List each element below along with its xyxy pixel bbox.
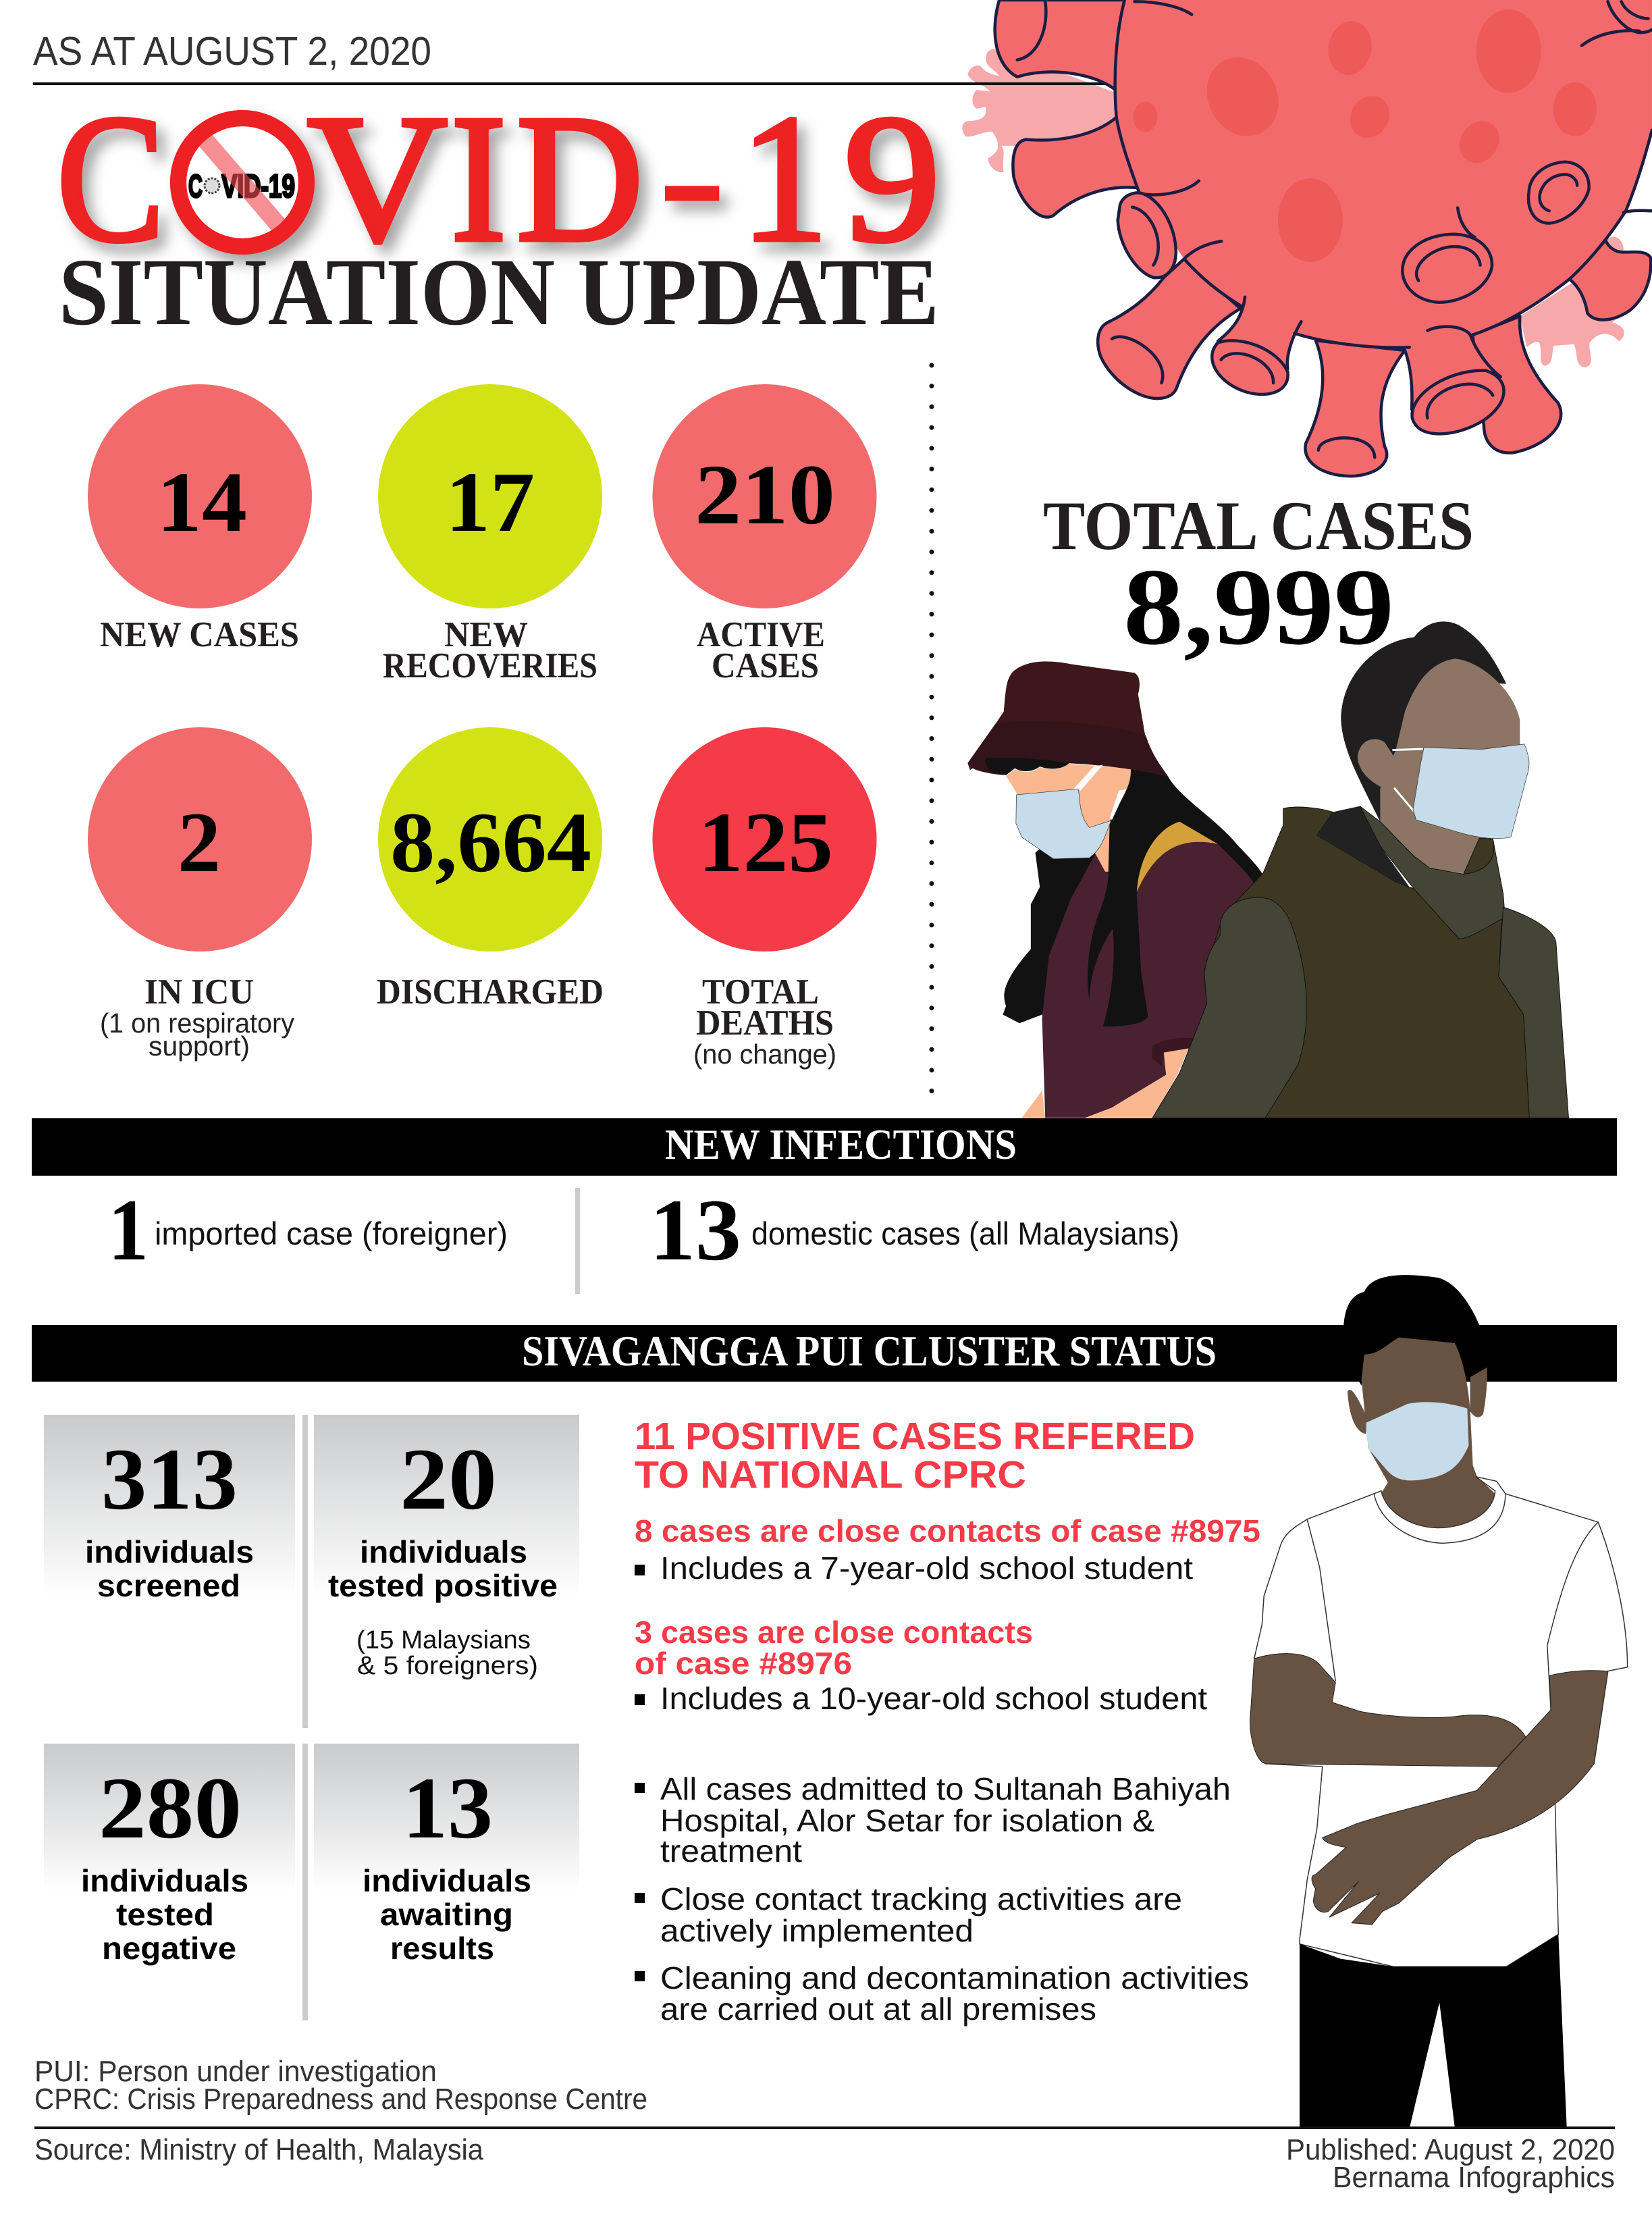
title: COVID-19: C [57,78,165,280]
panel: tested positive: tested positive [328,1568,558,1603]
publication credit: Published: August 2, 2020 [1286,2133,1615,2166]
bullet: hospital admission: treatment [660,1833,802,1869]
text block: case 8975 contacts: Includes a 7-year-old school student [660,1550,1193,1586]
panel: awaiting results: 13 [402,1760,493,1857]
icon: prohibition sign with COVID-19: C [188,169,203,205]
glossary notes: CPRC: Crisis Preparedness and Response Centre [34,2083,647,2116]
panel: new cases: NEW CASES [100,615,299,654]
panel: tested positive: & 5 foreigners) [357,1652,538,1680]
text block: case 8975 contacts [635,1513,1260,1586]
icon: prohibition sign with COVID-19: VID-19 [221,169,295,205]
heading bar: new infections [32,1118,1617,1176]
panel: new recoveries [378,384,602,685]
panel: tested negative: individuals [81,1863,248,1898]
panel: discharged [377,727,604,1012]
icon: prohibition sign with COVID-19 [178,118,307,246]
heading bar: new infections: NEW INFECTIONS [665,1120,1017,1168]
title: COVID-19: D [516,78,643,280]
illustration: two masked pedestrians [967,621,1568,1118]
total cases number: 8,999 [1123,547,1394,668]
icon: pale background viruses [962,49,1630,367]
stat: imported case [108,1182,508,1279]
panel: tested negative: tested [116,1897,214,1932]
vertical divider [575,1188,580,1294]
panel: awaiting results: results [390,1931,494,1966]
dotted divider [929,365,934,1094]
header rule [33,82,1112,85]
text block: case 8975 contacts: 8 cases are close contacts of case #8975 [635,1513,1260,1548]
title: COVID-19: V [307,78,448,280]
panel: in ICU [88,727,312,1062]
panel: new cases [88,384,312,654]
stat: domestic cases [649,1182,1179,1279]
stat: imported case: imported case (foreigner) [155,1216,508,1251]
panel: in ICU: IN ICU [144,972,254,1012]
bullet: contact tracking: actively implemented [660,1913,974,1948]
text block: case 8976 contacts [635,1615,1207,1716]
bullet: decontamination [635,1960,1249,2027]
heading: positive cases referred: TO NATIONAL CPRC [635,1453,1026,1496]
stat: imported case: 1 [108,1182,149,1279]
source: Source: Ministry of Health, Malaysia [34,2133,483,2166]
text block: case 8976 contacts: Includes a 10-year-old school student [660,1681,1207,1716]
panel: in ICU: 2 [178,795,221,890]
glossary notes [34,2055,647,2116]
publication credit [1286,2133,1615,2194]
panel: tested positive: 20 [400,1431,497,1528]
panel: active cases: CASES [712,646,819,685]
bullet: hospital admission: All cases admitted to Sultanah Bahiyah [660,1771,1231,1806]
panel: total deaths: DEATHS [696,1003,834,1043]
panel: tested negative [44,1744,295,1966]
heading bar: Sivagangga cluster [32,1325,1617,1382]
title: COVID-19: 9 [844,78,940,280]
panel: new cases: 14 [157,455,247,550]
panel: discharged: 8,664 [390,795,591,890]
panel: new recoveries: 17 [446,455,535,550]
panel: screened: 313 [101,1431,238,1528]
bullet: hospital admission: Hospital, Alor Setar for isolation & [660,1803,1154,1838]
total cases heading: TOTAL CASES [1043,488,1474,565]
panel: screened: individuals [85,1534,254,1569]
footer rule [34,2126,1615,2129]
bullet: contact tracking [635,1881,1182,1948]
panel: awaiting results: individuals [363,1863,531,1898]
stat: domestic cases: 13 [649,1182,741,1279]
text block: case 8976 contacts: of case #8976 [635,1646,852,1681]
text block: case 8976 contacts: 3 cases are close contacts [635,1615,1033,1650]
divider: stats upper [302,1415,308,1728]
panel: new recoveries: NEW [444,615,528,654]
panel: active cases [652,384,876,685]
panel: total deaths: TOTAL [702,972,819,1012]
heading bar: Sivagangga cluster: SIVAGANGGA PUI CLUSTER STATUS [522,1327,1217,1375]
panel: total deaths: 125 [698,795,833,890]
bullet: hospital admission [635,1771,1231,1869]
publication credit: Bernama Infographics [1333,2161,1615,2194]
panel: screened [44,1415,295,1603]
title: COVID-19: I [451,78,506,280]
glossary notes: PUI: Person under investigation [34,2055,437,2088]
panel: new recoveries: RECOVERIES [383,646,597,685]
title: COVID-19 [57,74,940,280]
title: COVID-19: - [658,74,726,276]
panel: screened: screened [97,1568,240,1603]
title: COVID-19: 1 [741,78,828,280]
bullet: decontamination: Cleaning and decontamination activities [660,1960,1249,1995]
panel: tested negative: negative [102,1931,236,1966]
illustration: standing man in mask [1250,1275,1628,2128]
panel: active cases: 210 [695,448,835,542]
panel: tested negative: 280 [99,1760,242,1857]
panel: total deaths [652,727,876,1070]
panel: active cases: ACTIVE [697,615,825,654]
heading: positive cases referred: 11 POSITIVE CASES REFERED [635,1415,1195,1458]
bullet: decontamination: are carried out at all premises [660,1991,1096,2027]
bullet: contact tracking: Close contact tracking activities are [660,1881,1182,1916]
panel: in ICU: support) [149,1030,250,1062]
heading: positive cases referred [635,1415,1195,1496]
panel: discharged: DISCHARGED [377,972,604,1012]
panel: total deaths: (no change) [693,1039,836,1070]
panel: in ICU: (1 on respiratory [100,1008,294,1039]
panel: tested positive: (15 Malaysians [356,1626,531,1654]
panel: tested positive: individuals [360,1534,527,1569]
stat: domestic cases: domestic cases (all Malaysians) [751,1216,1179,1251]
date heading: AS AT AUGUST 2, 2020 [33,29,431,74]
panel: tested positive [314,1415,579,1680]
subtitle: SITUATION UPDATE [59,238,939,345]
panel: awaiting results: awaiting [380,1897,513,1932]
panel: awaiting results [314,1744,579,1966]
icon: coronavirus illustration [995,0,1652,476]
divider: stats lower [302,1744,308,2020]
